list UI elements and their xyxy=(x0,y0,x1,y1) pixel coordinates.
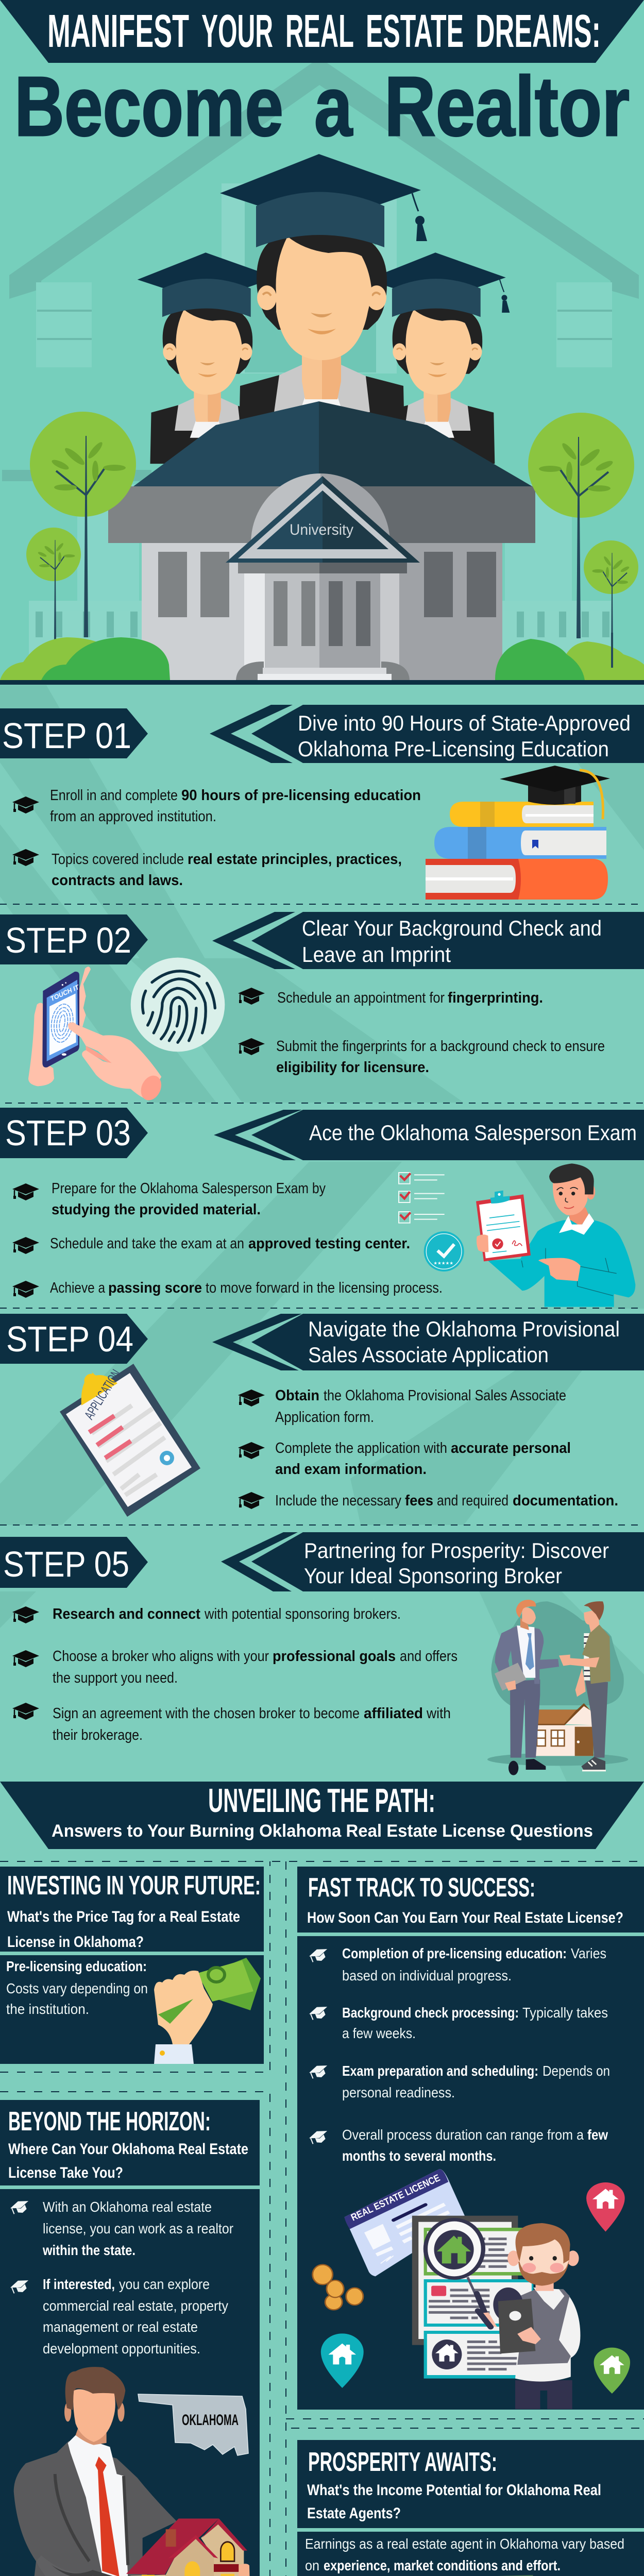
bullet text: with license: license, you can work as a realtor xyxy=(43,2221,233,2236)
icon: approved badge xyxy=(424,1231,464,1272)
panel: investing in your future xyxy=(0,1867,264,2064)
icon: fingerprint xyxy=(131,958,225,1052)
licence card title: REAL ESTATE LICENCE xyxy=(349,2173,442,2224)
bullet text: completion xyxy=(342,1945,606,1984)
icon: bullet cap xyxy=(12,1650,39,1667)
bullet text: submit xyxy=(276,1038,605,1076)
bullet text: choose: and offers xyxy=(400,1648,457,1665)
bullet text: include: Include the necessary xyxy=(275,1493,401,1509)
illustration: phone and hand xyxy=(28,967,165,1104)
divider 4 xyxy=(0,1524,644,1526)
bullet text: background check: Background check processing: xyxy=(342,2005,519,2021)
step 03 heading banner xyxy=(214,1110,644,1160)
step 01 heading banner: Oklahoma Pre-Licensing Education xyxy=(298,737,609,761)
bullet text: complete: and exam information. xyxy=(275,1461,427,1478)
step 05 heading banner xyxy=(221,1532,644,1591)
divider 1 xyxy=(0,904,644,905)
hero illustration xyxy=(0,0,644,685)
step 03 panel xyxy=(0,1108,644,1307)
panel question: License in Oklahoma? xyxy=(7,1934,144,1951)
bullet text: research xyxy=(53,1606,401,1622)
illustration: checklist xyxy=(399,1173,445,1223)
icon: approved badge: ★★★★★ xyxy=(433,1261,453,1266)
step 02 heading banner xyxy=(212,912,644,969)
bullet text: achieve: passing score xyxy=(108,1280,202,1296)
banner: unveiling the path xyxy=(0,1782,644,1849)
bullet text: schedule: Schedule an appointment for xyxy=(277,990,445,1006)
bullet text: exam preparation: Depends on xyxy=(543,2063,610,2079)
title: become a realtor xyxy=(14,59,630,154)
title banner: YOUR xyxy=(201,6,273,57)
bullet text: completion: Varies xyxy=(571,1945,606,1961)
bullet text: exam preparation: Exam preparation and scheduling: xyxy=(342,2063,538,2079)
bullet text: obtain: Obtain xyxy=(275,1387,319,1404)
bullet text: exam preparation: personal readiness. xyxy=(342,2084,455,2100)
illustration: books and cap xyxy=(426,766,610,900)
bullet text: obtain xyxy=(275,1387,566,1426)
panel question xyxy=(7,1908,240,1951)
icon: bullet cap xyxy=(12,796,39,814)
bullet text: enroll: 90 hours of pre-licensing education xyxy=(181,787,421,804)
bullet text: choose: Choose a broker who aligns with your xyxy=(53,1648,269,1665)
bullet text: submit: Submit the fingerprints for a background check to ensure xyxy=(276,1038,605,1055)
panel: beyond the horizon xyxy=(0,2100,260,2576)
bullet text: schedule exam xyxy=(50,1235,410,1252)
tree: small left xyxy=(26,528,81,641)
bullet text: schedule exam: Schedule and take the exam at an xyxy=(50,1235,244,1252)
university sign text: University xyxy=(290,521,353,538)
title banner: ESTATE xyxy=(366,6,464,57)
bullet text: include: documentation. xyxy=(513,1493,618,1509)
step 01 heading banner xyxy=(210,705,644,763)
step 04 heading banner xyxy=(212,1314,644,1370)
bullet text: prepare xyxy=(52,1180,326,1218)
step 03 tag: STEP 03 xyxy=(5,1113,131,1153)
bullet text: achieve: to move forward in the licensing process. xyxy=(206,1280,443,1296)
bullet text: include xyxy=(275,1493,618,1509)
icon: bullet cap xyxy=(12,1237,39,1254)
panel question xyxy=(307,2482,601,2522)
illustration: phone and hand: TOUCH IT xyxy=(49,984,81,1003)
tree: big left xyxy=(30,412,136,637)
panel question: What's the Income Potential for Oklahoma Real xyxy=(307,2482,601,2499)
bullet text: submit: eligibility for licensure. xyxy=(276,1059,429,1076)
illustration: fist with money xyxy=(154,1958,261,2064)
icon: bullet cap xyxy=(238,1492,265,1509)
dashed frame lines xyxy=(0,1861,644,2576)
suited man xyxy=(495,1600,559,1775)
title banner: REAL xyxy=(285,6,354,57)
divider 3 xyxy=(0,1308,644,1309)
bullet text: enroll: Enroll in and complete xyxy=(50,787,178,804)
bullet text: background check xyxy=(342,2005,608,2041)
panel: fast track to success xyxy=(297,1867,644,2410)
title banner: MANIFEST xyxy=(47,6,189,57)
bullet text: topics: contracts and laws. xyxy=(52,872,183,889)
bullet text: schedule exam: approved testing center. xyxy=(248,1235,410,1252)
bullet text: with license: within the state. xyxy=(42,2242,135,2258)
step 02 heading banner: Leave an Imprint xyxy=(302,942,451,967)
illustration: license search xyxy=(313,2169,630,2410)
step 02 panel xyxy=(0,912,644,1104)
bullet text: research: with potential sponsoring brokers. xyxy=(204,1606,401,1622)
illustration: handshake and house xyxy=(487,1600,628,1775)
icon: bullet cap xyxy=(12,1703,39,1720)
central graduate xyxy=(220,154,427,460)
icon: bullet cap xyxy=(12,1183,39,1200)
magnifier xyxy=(426,2219,490,2327)
step 05 panel xyxy=(0,1532,644,1775)
icon: red pin xyxy=(586,2182,625,2232)
panel body text: the institution. xyxy=(6,2001,89,2017)
illustration: oklahoma map: OKLAHOMA xyxy=(182,2412,239,2429)
icon: white cap xyxy=(308,2128,330,2146)
bullet text: enroll: from an approved institution. xyxy=(50,808,216,825)
icon: bullet cap xyxy=(12,1606,39,1623)
step 05 heading banner: Partnering for Prosperity: Discover xyxy=(304,1538,609,1563)
casual man xyxy=(559,1601,611,1771)
bullet text: complete xyxy=(275,1440,571,1478)
illustration: application clipboard: APPLICATION xyxy=(81,1367,124,1422)
step 04 panel xyxy=(0,1314,644,1517)
bullet text: sign: Sign an agreement with the chosen broker to become xyxy=(53,1705,360,1722)
bullet text: prepare: studying the provided material. xyxy=(52,1201,261,1218)
bullet text: achieve xyxy=(50,1280,443,1296)
bullet text: if interested: development opportunities. xyxy=(43,2341,200,2357)
step 05 tag: STEP 05 xyxy=(3,1544,129,1584)
bullet text: overall: Overall process duration can range from a xyxy=(342,2127,584,2143)
bullet text: completion: based on individual progress. xyxy=(342,1968,512,1984)
illustration: application clipboard xyxy=(60,1364,200,1517)
illustration: agent holding house xyxy=(14,2367,250,2576)
illustration: oklahoma map xyxy=(138,2394,248,2455)
hero base line xyxy=(0,680,644,685)
bullet text: overall: months to several months. xyxy=(342,2148,496,2164)
bullet text: topics xyxy=(52,851,402,889)
icon: coins xyxy=(313,2265,363,2310)
bullet text: achieve: Achieve a xyxy=(50,1280,106,1296)
panel body text xyxy=(305,2536,624,2573)
banner: unveiling the path: Answers to Your Burning Oklahoma Real Estate License Questions xyxy=(52,1821,593,1841)
bullet text: prepare: Prepare for the Oklahoma Salesperson Exam by xyxy=(52,1180,326,1197)
illustration: person with clipboard xyxy=(476,1163,635,1307)
side student right xyxy=(367,252,510,464)
bullet text: with license: With an Oklahoma real estate xyxy=(43,2199,212,2215)
panel body text: on xyxy=(305,2557,319,2573)
house xyxy=(524,1703,594,1756)
step 02 heading banner: Clear Your Background Check and xyxy=(302,916,602,940)
step 04 tag: STEP 04 xyxy=(6,1319,133,1359)
step 01 panel xyxy=(0,705,644,900)
panel question: What's the Price Tag for a Real Estate xyxy=(7,1908,240,1925)
tree: big right xyxy=(528,413,634,638)
bullet text: include: fees xyxy=(405,1493,433,1509)
subtle diagonal stripes xyxy=(0,685,644,1782)
icon: white cap xyxy=(308,1946,330,1964)
bullet text: overall xyxy=(342,2127,608,2164)
icon: bullet cap xyxy=(12,849,39,866)
panel heading: BEYOND THE HORIZON: xyxy=(8,2107,211,2137)
banner: unveiling the path: UNVEILING THE PATH: xyxy=(208,1782,435,1819)
bullet text: background check: Typically takes xyxy=(522,2005,608,2021)
icon: bullet cap xyxy=(238,1389,265,1406)
panel heading: PROSPERITY AWAITS: xyxy=(308,2447,497,2477)
icon: bullet cap xyxy=(238,1038,265,1055)
tree: small right xyxy=(584,540,638,668)
bullet text: if interested xyxy=(43,2276,228,2357)
panel question: Estate Agents? xyxy=(307,2505,401,2522)
bullet text: exam preparation xyxy=(342,2063,610,2100)
step 04 heading banner: Sales Associate Application xyxy=(308,1343,549,1367)
bullet text: with license xyxy=(42,2199,233,2258)
bullet text: sign: affiliated xyxy=(364,1705,423,1722)
step 02 tag: STEP 02 xyxy=(5,920,131,960)
bullet text: topics: real estate principles, practices, xyxy=(188,851,402,868)
icon: teal pin xyxy=(321,2333,364,2388)
panel body text xyxy=(6,1958,148,2017)
icon: white cap xyxy=(308,2004,330,2022)
panel question xyxy=(8,2141,248,2181)
bullet text: choose: the support you need. xyxy=(53,1670,178,1686)
panel: prosperity awaits xyxy=(297,2440,644,2576)
bullet text: complete: accurate personal xyxy=(451,1440,571,1456)
step 05 heading banner: Your Ideal Sponsoring Broker xyxy=(304,1564,562,1588)
icon: bullet cap xyxy=(238,988,265,1005)
bullet text: enroll xyxy=(50,787,421,825)
bullet text: topics: Topics covered include xyxy=(52,851,184,868)
step 01 tag: STEP 01 xyxy=(2,716,131,756)
panel body text: Costs vary depending on xyxy=(6,1980,148,1996)
hero background xyxy=(0,0,644,680)
bullet text: research: Research and connect xyxy=(53,1606,200,1622)
side student left xyxy=(138,252,276,464)
bullet text: overall: few xyxy=(587,2127,608,2143)
house model xyxy=(126,2519,250,2576)
bullet text: choose xyxy=(53,1648,457,1686)
title: become a realtor: a xyxy=(314,59,353,154)
icon: green pin xyxy=(594,2348,630,2394)
panel body text: experience, market conditions and effort. xyxy=(324,2557,561,2573)
bullet text: if interested: commercial real estate, property xyxy=(43,2298,228,2314)
icon: white cap xyxy=(308,2062,330,2081)
panel heading: INVESTING IN YOUR FUTURE: xyxy=(7,1871,261,1901)
step 04 heading banner: Navigate the Oklahoma Provisional xyxy=(308,1317,620,1341)
bullet text: if interested: management or real estate xyxy=(43,2319,198,2335)
icon: bullet cap xyxy=(238,1442,265,1459)
panel question: License Take You? xyxy=(8,2164,123,2181)
icon: white cap xyxy=(9,2198,31,2216)
background house silhouette xyxy=(2,58,639,680)
bullet text: sign xyxy=(53,1705,451,1743)
document stack xyxy=(412,2216,533,2379)
panel question: Where Can Your Oklahoma Real Estate xyxy=(8,2141,248,2158)
university building xyxy=(108,401,535,680)
bullet text: complete: Complete the application with xyxy=(275,1440,447,1456)
bullet text: choose: professional goals xyxy=(273,1648,396,1665)
bullet text: background check: a few weeks. xyxy=(342,2025,416,2041)
bearded man xyxy=(478,2223,580,2410)
bullet text: obtain: Application form. xyxy=(275,1409,374,1426)
icon: white cap xyxy=(9,2277,31,2296)
bullet text: sign: with xyxy=(426,1705,451,1722)
bushes xyxy=(0,633,644,680)
divider 2 xyxy=(5,1103,644,1104)
panel body text: Pre-licensing education: xyxy=(6,1958,147,1974)
bullet text: sign: their brokerage. xyxy=(53,1727,143,1743)
bullet text: schedule: fingerprinting. xyxy=(448,990,543,1006)
licence card xyxy=(344,2169,466,2276)
bullet text: if interested: If interested, xyxy=(43,2276,115,2292)
bullet text: obtain: the Oklahoma Provisional Sales Associate xyxy=(324,1387,566,1404)
illustration: coins and money bag xyxy=(368,2575,556,2576)
bullet text: completion: Completion of pre-licensing education: xyxy=(342,1945,567,1961)
icon: bullet cap xyxy=(12,1281,39,1298)
bullet text: if interested: you can explore xyxy=(119,2276,210,2292)
title banner xyxy=(0,0,644,63)
title: become a realtor: Become xyxy=(14,59,283,154)
bullet text: include: and required xyxy=(437,1493,509,1509)
